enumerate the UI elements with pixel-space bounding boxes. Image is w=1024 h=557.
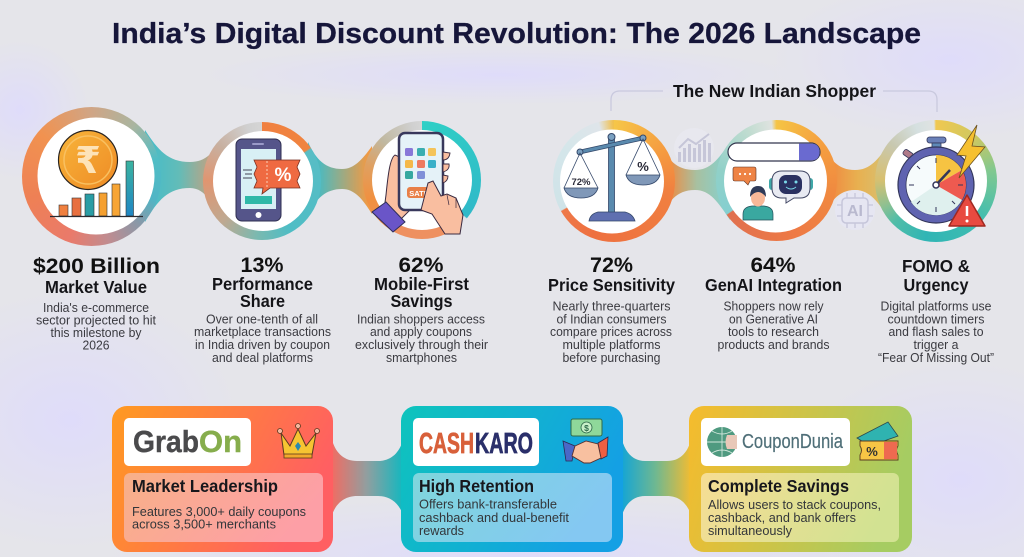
icon: coupon tickets	[857, 422, 898, 460]
description	[718, 298, 830, 352]
value: 64%	[750, 253, 796, 277]
panel: high retention: High Retention	[419, 476, 534, 496]
description: India's e-commerce	[43, 300, 149, 315]
logo: GrabOn	[124, 418, 251, 466]
description: smartphones	[386, 350, 457, 365]
stat: price sensitivity	[548, 120, 675, 365]
value: $200 Billion	[33, 254, 160, 278]
icon: search bar, robot and person	[728, 143, 820, 220]
panel: complete savings: cashback, and bank offers	[708, 510, 856, 525]
card: CashKaro	[401, 406, 623, 552]
description: and apply coupons	[370, 324, 472, 339]
icon: balance scale: %	[637, 159, 649, 174]
description: Shoppers now rely	[724, 298, 824, 314]
description: trigger a	[914, 337, 959, 352]
description: countdown timers	[888, 312, 985, 326]
description: on Generative AI	[729, 312, 818, 326]
stat: FOMO and urgency	[875, 120, 997, 365]
panel: high retention: rewards	[419, 523, 464, 538]
stat: performance share	[194, 122, 331, 365]
panel: complete savings	[701, 473, 899, 542]
stat: GenAI integration	[705, 120, 842, 352]
description: sector projected to hit	[36, 312, 156, 328]
description: Digital platforms use	[880, 298, 992, 314]
description: in India driven by coupon	[195, 337, 330, 352]
icon: handshake with money	[563, 419, 608, 463]
icon: crown	[278, 424, 320, 458]
ring	[875, 120, 997, 242]
connector: performance share to mobile-first	[308, 142, 372, 216]
description: Over one-tenth of all	[206, 312, 318, 326]
title: India’s Digital Discount Revolution: The 2026 Landscape	[112, 18, 921, 50]
panel: high retention	[413, 473, 612, 542]
description	[355, 312, 489, 365]
logo: CashKaro: CASH	[419, 428, 474, 460]
connector: GrabOn to CashKaro	[332, 440, 403, 515]
value: 72%	[590, 253, 633, 277]
description: of Indian consumers	[556, 312, 667, 326]
label: FOMO &	[902, 256, 970, 276]
icon: rupee coin and bars	[50, 130, 143, 216]
icon: hands holding phone: SATE	[409, 189, 429, 198]
panel: complete savings: Complete Savings	[708, 476, 849, 496]
panel: complete savings: Allows users to stack coupons,	[708, 497, 881, 512]
description: this milestone by	[50, 325, 142, 340]
icon: rupee coin and bars: ₹	[75, 139, 101, 182]
label: Performance	[212, 274, 313, 294]
ring	[203, 122, 321, 240]
description	[194, 312, 331, 365]
panel: market leadership	[124, 473, 323, 542]
label: Price Sensitivity	[548, 275, 675, 295]
connector: market value to performance share	[145, 130, 224, 226]
connector: price sensitivity to GenAI	[660, 142, 730, 220]
icon: faint AI chip	[835, 190, 875, 230]
description: tools to research	[728, 324, 819, 339]
label second line: Urgency	[904, 275, 969, 295]
description: exclusively through their	[355, 337, 489, 352]
description: products and brands	[718, 337, 830, 352]
panel: high retention: Offers bank-transferable	[419, 496, 557, 512]
ring	[363, 121, 481, 239]
description: Indian shoppers access	[357, 312, 485, 326]
icon: balance scale	[564, 134, 660, 221]
ring	[716, 120, 837, 241]
card: GrabOn	[112, 406, 333, 552]
value: 62%	[398, 253, 444, 277]
panel: high retention: cashback and dual-benefit	[419, 510, 569, 525]
icon: coupon tickets: %	[866, 444, 878, 459]
label: GenAI Integration	[705, 275, 842, 295]
description: multiple platforms	[562, 337, 661, 352]
description: compare prices across	[550, 324, 672, 339]
panel: market leadership: across 3,500+ merchants	[132, 516, 276, 532]
label: Mobile-First	[374, 274, 469, 294]
description	[550, 298, 672, 365]
icon: faint growth chart	[674, 128, 714, 168]
stat: mobile-first savings	[355, 121, 489, 365]
logo: GrabOn: Grab	[133, 424, 199, 459]
icon: stopwatch with lightning and warning	[898, 125, 985, 226]
panel: complete savings: simultaneously	[708, 523, 792, 538]
description	[36, 300, 156, 352]
value: 13%	[240, 253, 284, 277]
ring	[22, 107, 161, 246]
icon: phone with coupon	[236, 139, 300, 221]
connector: GenAI to FOMO	[822, 142, 890, 220]
description: and deal platforms	[212, 350, 313, 365]
description: Nearly three-quarters	[552, 298, 671, 314]
ring	[553, 120, 675, 242]
logo: CashKaro	[413, 418, 539, 466]
panel: market leadership: Features 3,000+ daily coupons	[132, 504, 306, 519]
icon: faint AI chip: AI	[847, 203, 863, 220]
description: marketplace transactions	[194, 324, 331, 339]
logo: CashKaro: KARO	[475, 428, 533, 460]
stat: market value	[22, 107, 161, 352]
label: Market Value	[45, 277, 147, 297]
description	[878, 298, 994, 365]
label second line: Savings	[390, 291, 453, 311]
description: 2026	[82, 338, 110, 352]
logo: CouponDunia: CouponDunia	[742, 431, 844, 453]
panel: market leadership: Market Leadership	[132, 476, 278, 496]
label second line: Share	[240, 291, 285, 311]
connector: CashKaro to CouponDunia	[622, 440, 691, 515]
group heading: the new Indian shopper: The New Indian Shopper	[673, 81, 876, 101]
icon: hands holding phone	[372, 133, 463, 234]
card: CouponDunia	[689, 406, 912, 552]
description: “Fear Of Missing Out”	[878, 350, 994, 365]
icon: handshake with money: $	[584, 423, 589, 433]
logo: GrabOn: On	[199, 424, 242, 459]
logo: CouponDunia	[701, 418, 850, 466]
group heading: the new Indian shopper	[611, 81, 937, 112]
description: before purchasing	[562, 350, 660, 365]
icon: balance scale: 72%	[571, 177, 591, 188]
icon: phone with coupon: %	[275, 165, 292, 186]
description: and flash sales to	[888, 324, 984, 339]
